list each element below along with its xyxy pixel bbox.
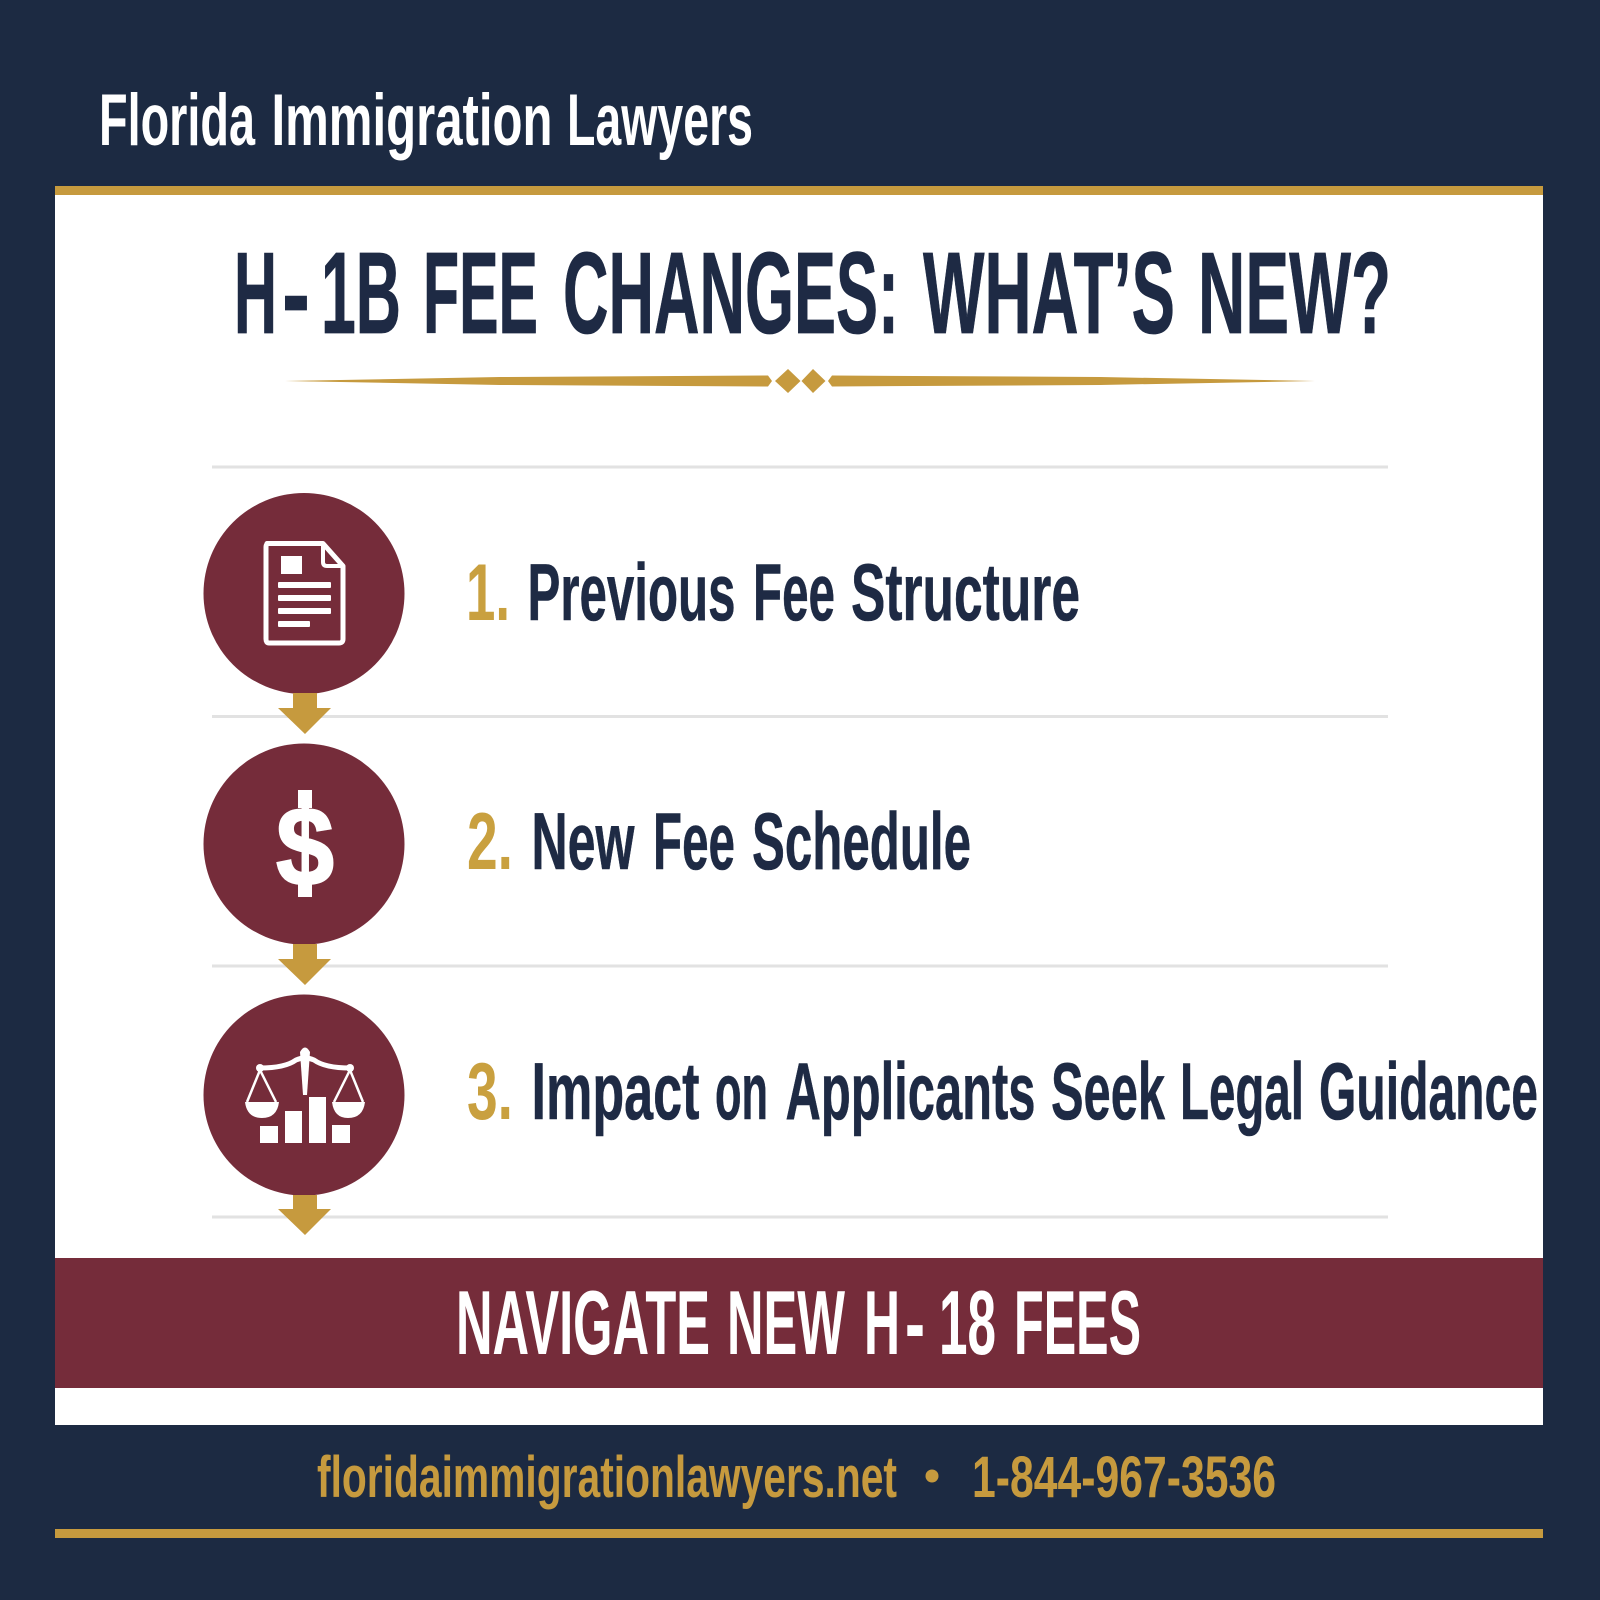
arrow down [278, 693, 331, 734]
heading: NEW? [1198, 228, 1391, 358]
step label 1: Fee [753, 548, 835, 638]
banner text: FEES [1014, 1273, 1141, 1374]
ornamental gold divider [285, 369, 1315, 393]
panel: white content card [55, 186, 1543, 1425]
banner: call to action [55, 1258, 1543, 1388]
banner text: 18 [939, 1273, 996, 1374]
gold top rule [55, 186, 1543, 195]
heading: 1B [321, 228, 401, 358]
heading: CHANGES: [563, 228, 899, 358]
icon: scales and bars [204, 994, 404, 1196]
row separator lines [212, 466, 1388, 1218]
banner text: H [864, 1273, 900, 1374]
step label 2: Schedule [752, 797, 971, 887]
step label 2: Fee [653, 797, 735, 887]
step label 1: Previous [528, 548, 736, 638]
step label 3: Seek [1051, 1047, 1166, 1137]
icon: dollar sign: $ [276, 784, 334, 909]
step label 2: New [532, 797, 635, 887]
step number 1: 1. [466, 548, 510, 638]
contact line [317, 1445, 1276, 1510]
firm name: Immigration [272, 80, 552, 161]
banner text: - [905, 1273, 925, 1374]
banner text: NAVIGATE [456, 1273, 710, 1374]
separator bullet [926, 1470, 938, 1482]
phone number: 1-844-967-3536 [972, 1445, 1276, 1510]
arrow down [278, 1195, 331, 1235]
heading: - [282, 228, 310, 358]
step number 3: 3. [467, 1047, 513, 1137]
arrow down [278, 944, 331, 985]
firm name: Lawyers [567, 80, 753, 161]
step label 3: Impact [532, 1047, 700, 1137]
gold bottom rule [55, 1529, 1543, 1538]
heading: H [234, 228, 277, 358]
icon: dollar sign [204, 744, 404, 944]
website: floridaimmigrationlawyers.net [317, 1445, 897, 1510]
step number 2: 2. [467, 797, 513, 887]
step label 3: on [715, 1047, 768, 1137]
step label 1: Structure [851, 548, 1080, 638]
heading: WHAT’S [923, 228, 1175, 358]
step 2: new fee schedule [204, 744, 971, 985]
banner text: NEW [727, 1273, 845, 1374]
step label 3: Applicants [786, 1047, 1036, 1137]
firm name: Florida [99, 80, 256, 161]
step 3: impact on applicants [204, 994, 1538, 1235]
step 1: previous fee structure [204, 493, 1080, 734]
icon: document [204, 493, 404, 694]
heading: FEE [423, 228, 538, 358]
step label 3: Legal [1180, 1047, 1304, 1137]
